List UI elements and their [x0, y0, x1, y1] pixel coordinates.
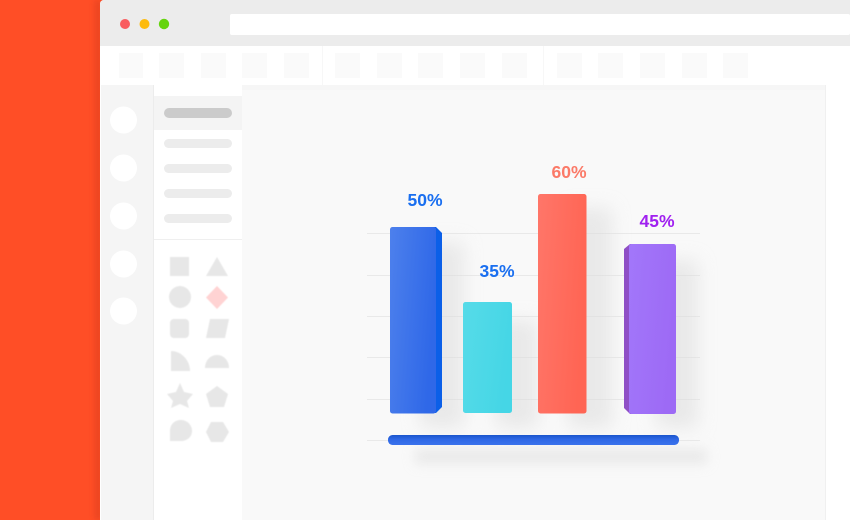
label: 60%: 60% [551, 162, 587, 182]
side panel [153, 85, 242, 520]
bar: 35% [463, 261, 515, 413]
left icon rail [101, 85, 154, 520]
label: 35%: 35% [479, 261, 515, 281]
bar chart [367, 162, 707, 464]
bar: 50% [390, 190, 443, 414]
window control buttons [120, 19, 169, 29]
label: 50%: 50% [407, 190, 443, 210]
bar: 45% [624, 211, 676, 414]
bar: 60% [538, 162, 587, 414]
baseline platform [388, 435, 679, 445]
toolbar [100, 46, 850, 85]
canvas area [242, 85, 826, 520]
label: 45%: 45% [639, 211, 675, 231]
title bar [100, 0, 850, 46]
shape palette [167, 257, 229, 442]
address bar [230, 14, 850, 35]
